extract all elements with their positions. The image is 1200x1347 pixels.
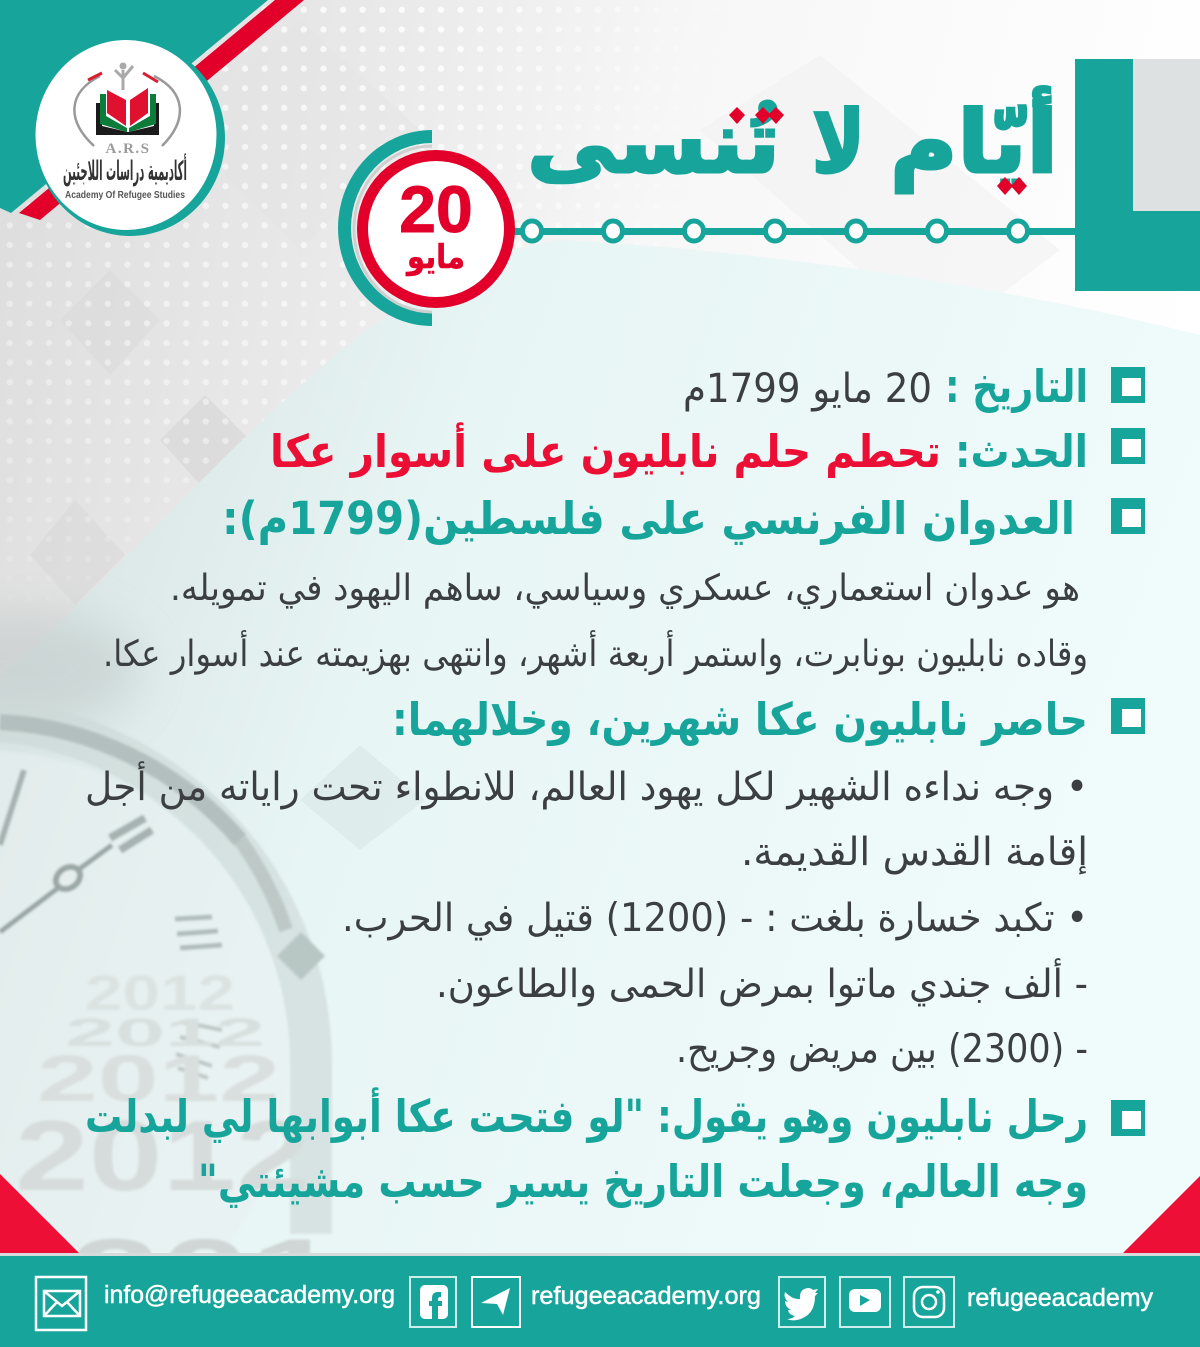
icon: facebook [410,1277,456,1327]
title: لا [812,93,865,193]
bullet: quote [1111,1100,1145,1136]
clock image: 2012 [85,965,235,1021]
date badge [338,130,515,326]
bullet: date [1111,367,1145,403]
line: date: التاريخ : [945,360,1088,413]
icon: instagram [904,1277,954,1327]
bullet: event [1111,428,1145,464]
bullet: aggression [1111,498,1145,534]
heading: aggression: العدوان الفرنسي على فلسطين(1799م): [222,492,1075,545]
title accent diamonds [729,107,1027,195]
footer [0,1253,1200,1347]
line: event: تحطم حلم نابليون على أسوار عكا [270,422,941,478]
website: refugeeacademy.org [531,1282,761,1310]
clock image: 2012 [37,1041,280,1115]
list: siege item 1 line 1: • وجه نداءه الشهير لكل يهود العالم، للانطواء تحت راياته من أجل [85,761,1088,810]
corner triangle: bottom left [0,1174,80,1254]
heading: siege: حاصر نابليون عكا شهرين، وخلالهما: [392,693,1088,746]
bullet: siege [1111,698,1145,734]
logo text: english name: Academy Of Refugee Studies [65,190,185,201]
line: event: الحدث: [955,425,1088,478]
clock image: 201 [70,1220,340,1326]
line: date: 20 مايو 1799م [683,366,932,412]
text: أكاديمية دراسات اللاجئين [63,153,187,187]
date month: مايو [405,237,465,277]
corner triangle: bottom right [1122,1176,1200,1254]
icon: youtube [840,1277,890,1327]
paragraph line 2: وقاده نابليون بونابرت، واستمر أربعة أشهر، وانتهى بهزيمته عند أسوار عكا. [103,630,1088,675]
title: تُنسى [527,93,780,193]
list: siege item 3: - ألف جندي ماتوا بمرض الحمى والطاعون. [436,958,1088,1007]
title [527,86,1058,193]
clock image: 2012 [15,1100,310,1212]
date number: 20 [399,172,473,246]
paragraph line 1: هو عدوان استعماري، عسكري وسياسي، ساهم اليهود في تمويله. [170,568,1080,609]
logo emblem: open book [74,62,180,146]
logo text: initials: A.R.S [105,141,151,157]
list: siege item 1 line 2: إقامة القدس القديمة. [741,830,1088,875]
list: siege item 2: • تكبد خسارة بلغت : - (1200) قتيل في الحرب. [342,896,1088,941]
timeline [510,221,1076,241]
right L-shaped block [1075,59,1200,291]
email address: info@refugeeacademy.org [104,1281,395,1309]
top-left corner banner [0,0,304,220]
icon: email [36,1277,86,1330]
list: siege item 4: - (2300) بين مريض وجريح. [676,1027,1088,1072]
title: أيّام [890,86,1058,193]
clock image: 2012 [65,1011,265,1055]
line: date [683,360,1088,413]
clock image [0,714,332,1253]
icon: twitter [779,1277,825,1327]
social handle: refugeeacademy [967,1284,1153,1312]
icon: telegram [472,1277,520,1327]
logo badge [35,40,225,236]
